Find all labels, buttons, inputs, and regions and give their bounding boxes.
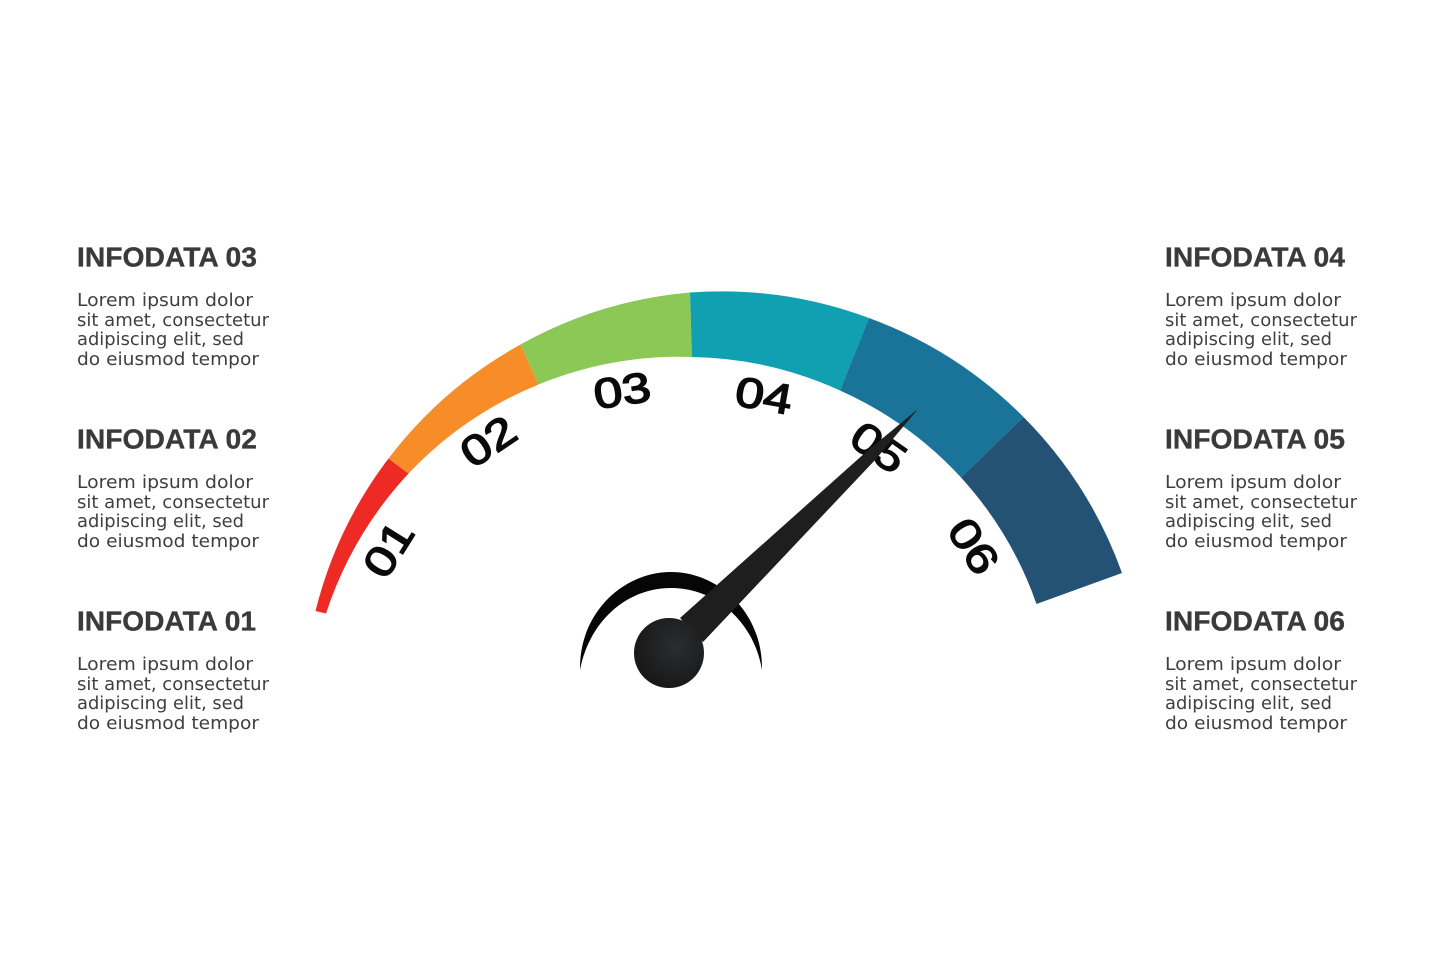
segment 06 navy xyxy=(961,417,1122,604)
text block: infodata 04: adipiscing elit, sed xyxy=(1165,330,1332,350)
chart: gauge arc segments xyxy=(316,291,1122,614)
needle hub xyxy=(634,618,704,688)
number 02: 02 xyxy=(452,406,525,477)
text block: infodata 01: Lorem ipsum dolor xyxy=(77,655,254,675)
scale numbers xyxy=(354,363,1009,586)
text block: infodata 02: INFODATA 02 xyxy=(77,424,257,454)
text block: infodata 02: Lorem ipsum dolor xyxy=(77,473,254,493)
text block: infodata 02: sit amet, consectetur xyxy=(77,493,270,513)
text block: infodata 03: sit amet, consectetur xyxy=(77,311,270,331)
text block: infodata 01: do eiusmod tempor xyxy=(77,714,260,734)
text block: infodata 03 xyxy=(77,242,270,370)
segment 01 red xyxy=(316,458,408,614)
segment 05 blue xyxy=(840,318,1024,478)
text block: infodata 02: adipiscing elit, sed xyxy=(77,512,244,532)
text block: infodata 01: adipiscing elit, sed xyxy=(77,694,244,714)
segment 02 orange xyxy=(388,344,538,474)
gauge dial crescent xyxy=(580,572,762,670)
text block: infodata 01: sit amet, consectetur xyxy=(77,675,270,695)
text block: infodata 06: adipiscing elit, sed xyxy=(1165,694,1332,714)
panel: left text column xyxy=(77,242,270,734)
text block: infodata 05: INFODATA 05 xyxy=(1165,424,1345,454)
text block: infodata 03: Lorem ipsum dolor xyxy=(77,291,254,311)
text block: infodata 01 xyxy=(77,606,270,734)
text block: infodata 05: adipiscing elit, sed xyxy=(1165,512,1332,532)
text block: infodata 05 xyxy=(1165,424,1358,552)
text block: infodata 05: sit amet, consectetur xyxy=(1165,493,1358,513)
text block: infodata 04: sit amet, consectetur xyxy=(1165,311,1358,331)
number 06: 06 xyxy=(938,510,1009,583)
text block: infodata 04: Lorem ipsum dolor xyxy=(1165,291,1342,311)
number 04: 04 xyxy=(732,368,796,424)
number 05: 05 xyxy=(842,412,915,483)
text block: infodata 06: Lorem ipsum dolor xyxy=(1165,655,1342,675)
text block: infodata 01: INFODATA 01 xyxy=(77,606,256,636)
text block: infodata 06: sit amet, consectetur xyxy=(1165,675,1358,695)
text block: infodata 06: INFODATA 06 xyxy=(1165,606,1345,636)
text block: infodata 02: do eiusmod tempor xyxy=(77,532,260,552)
panel: right text column xyxy=(1165,242,1358,734)
number 03: 03 xyxy=(590,363,654,418)
text block: infodata 05: Lorem ipsum dolor xyxy=(1165,473,1342,493)
text block: infodata 03: INFODATA 03 xyxy=(77,242,257,272)
text block: infodata 04: INFODATA 04 xyxy=(1165,242,1346,272)
needle xyxy=(680,409,918,642)
text block: infodata 04 xyxy=(1165,242,1358,370)
text block: infodata 04: do eiusmod tempor xyxy=(1165,350,1348,370)
text block: infodata 05: do eiusmod tempor xyxy=(1165,532,1348,552)
number 01: 01 xyxy=(354,513,423,586)
segment 04 teal xyxy=(690,291,869,390)
text block: infodata 06 xyxy=(1165,606,1358,734)
segment 03 green xyxy=(520,292,692,384)
text block: infodata 06: do eiusmod tempor xyxy=(1165,714,1348,734)
text block: infodata 02 xyxy=(77,424,270,552)
text block: infodata 03: adipiscing elit, sed xyxy=(77,330,244,350)
text block: infodata 03: do eiusmod tempor xyxy=(77,350,260,370)
